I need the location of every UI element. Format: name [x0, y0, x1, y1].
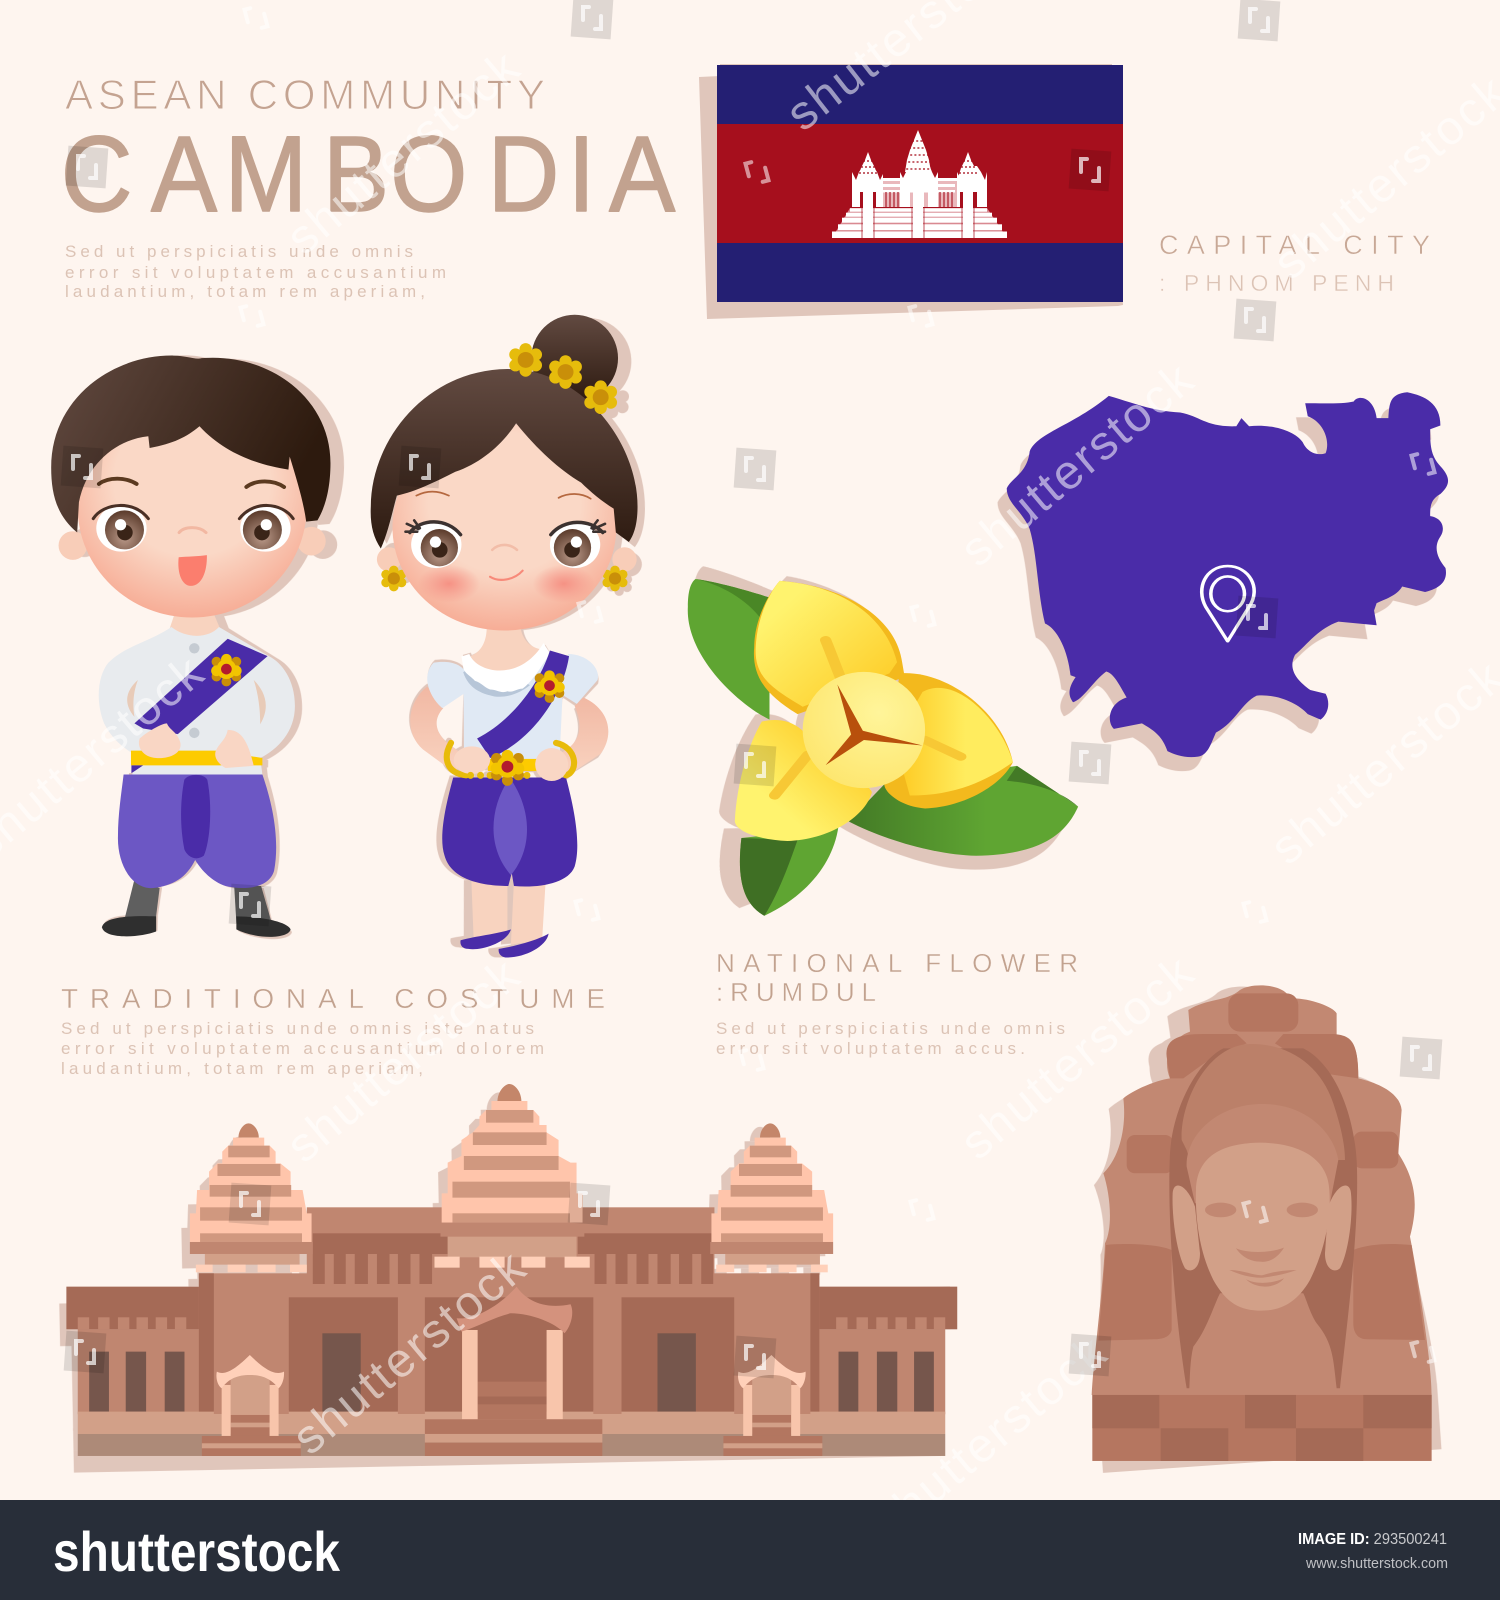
heading: Cambodia: CAMBODIA	[61, 113, 675, 234]
footer bar	[0, 1500, 1500, 1600]
capital city label: CAPITAL CITY	[1159, 230, 1430, 260]
woman ears	[377, 547, 637, 572]
capital name: : PHNOM PENH	[1159, 270, 1394, 296]
intro text: error sit voluptatem accusantium	[65, 263, 446, 282]
petal left	[735, 720, 872, 841]
costume body text: error sit voluptatem accusantium dolorem	[61, 1039, 544, 1058]
traditional costume heading: TRADITIONAL COSTUME	[61, 983, 605, 1014]
flower stamens	[775, 640, 961, 796]
man neck	[167, 611, 223, 637]
woman nose	[492, 545, 517, 550]
woman collar	[461, 643, 550, 697]
flower body text	[716, 1019, 1065, 1058]
woman neck	[471, 621, 542, 672]
national flower heading: NATIONAL FLOWER	[716, 948, 1078, 978]
sash flower	[211, 654, 242, 686]
stock photo watermarks: shutterstock	[951, 353, 1204, 577]
Angkor Wat temple illustration	[55, 1084, 957, 1473]
costume body text: laudantium, totam rem aperiam,	[61, 1059, 423, 1078]
statue ears	[1173, 1186, 1352, 1270]
man belt	[131, 751, 262, 773]
woman hair bun	[531, 315, 618, 402]
woman arms	[410, 686, 608, 775]
flower body text: error sit voluptatem accus.	[716, 1039, 1025, 1058]
man nose	[179, 528, 206, 533]
statue crown	[1182, 1044, 1345, 1193]
left small gate	[202, 1355, 301, 1456]
woman in traditional costume	[360, 310, 653, 963]
flower body text: Sed ut perspiciatis unde omnis	[716, 1019, 1065, 1038]
leaf right	[849, 766, 1078, 856]
leaf left	[688, 579, 769, 720]
stock photo watermarks: shutterstock	[951, 946, 1204, 1170]
woman legs and shoes	[460, 882, 549, 958]
woman earrings	[381, 566, 628, 591]
right tower	[710, 1123, 833, 1272]
petal right	[884, 673, 1013, 808]
costume body text: Sed ut perspiciatis unde omnis iste natus	[61, 1019, 534, 1038]
sash flower	[534, 670, 565, 703]
stock photo watermarks: shutterstock	[277, 41, 530, 265]
national flower heading: :RUMDUL	[716, 977, 876, 1007]
title block	[61, 71, 675, 301]
man in traditional costume	[51, 352, 347, 941]
woman sash	[477, 650, 569, 758]
stock photo watermarks: shutterstock	[283, 1241, 536, 1465]
footer url: www.shutterstock.com	[1305, 1555, 1448, 1572]
leaf bottom	[740, 827, 838, 916]
man eyes	[93, 479, 293, 552]
right small gate	[723, 1355, 822, 1456]
temple wings	[66, 1287, 957, 1414]
man ears	[59, 527, 326, 560]
footer image id: IMAGE ID: 293500241	[1298, 1531, 1447, 1548]
man hair	[51, 356, 330, 533]
national flower: rumdul	[663, 566, 1084, 938]
woman cheeks	[418, 565, 595, 603]
man hands	[139, 723, 254, 768]
map of Cambodia	[1007, 392, 1448, 757]
left tower	[190, 1123, 313, 1272]
national flower heading	[716, 948, 1078, 1007]
stock photo watermarks: shutterstock	[277, 949, 530, 1173]
statue stone base	[1092, 1395, 1432, 1461]
flower centre split	[826, 684, 923, 765]
intro text	[65, 242, 446, 301]
woman skirt	[442, 778, 577, 886]
statue nose and mouth	[1229, 1248, 1297, 1287]
flower centre	[803, 672, 925, 788]
statue eyes	[1205, 1203, 1318, 1217]
man sash	[134, 639, 268, 734]
temple main hall	[199, 1207, 819, 1413]
flag emblem: Angkor Wat	[832, 130, 1007, 238]
woman eyes	[406, 492, 605, 568]
man shirt	[99, 627, 295, 775]
petal top	[754, 581, 905, 714]
central gate	[425, 1287, 602, 1456]
Bayon stone face statue	[1069, 975, 1441, 1473]
man mouth	[178, 555, 207, 586]
capital city label	[1159, 230, 1430, 296]
woman belt and bracelets	[447, 743, 574, 786]
statue face	[1196, 1143, 1330, 1311]
temple galleries	[313, 1233, 713, 1284]
central tower	[434, 1084, 590, 1268]
flag of Cambodia	[699, 64, 1123, 319]
intro text: Sed ut perspiciatis unde omnis	[65, 242, 413, 261]
man trousers	[118, 775, 276, 888]
statue rock mass	[1092, 985, 1432, 1395]
costume body text	[61, 1019, 544, 1078]
statue hair strands	[1169, 1048, 1357, 1388]
temple base	[78, 1410, 945, 1456]
location pin	[1202, 566, 1254, 641]
man face	[78, 397, 307, 618]
footer logo: shutterstock	[53, 1520, 341, 1583]
map shape	[1007, 392, 1448, 757]
woman hair	[371, 369, 638, 549]
woman face	[392, 424, 616, 631]
man legs and shoes	[102, 879, 291, 937]
intro text: laudantium, totam rem aperiam,	[65, 282, 425, 301]
woman hair flowers	[509, 343, 617, 414]
stock photo watermarks: shutterstock	[864, 1326, 1117, 1550]
woman mouth	[490, 571, 523, 580]
heading: ASEAN Community: ASEAN COMMUNITY	[65, 71, 545, 118]
statue headband	[1187, 1104, 1338, 1203]
woman blouse	[427, 650, 598, 760]
